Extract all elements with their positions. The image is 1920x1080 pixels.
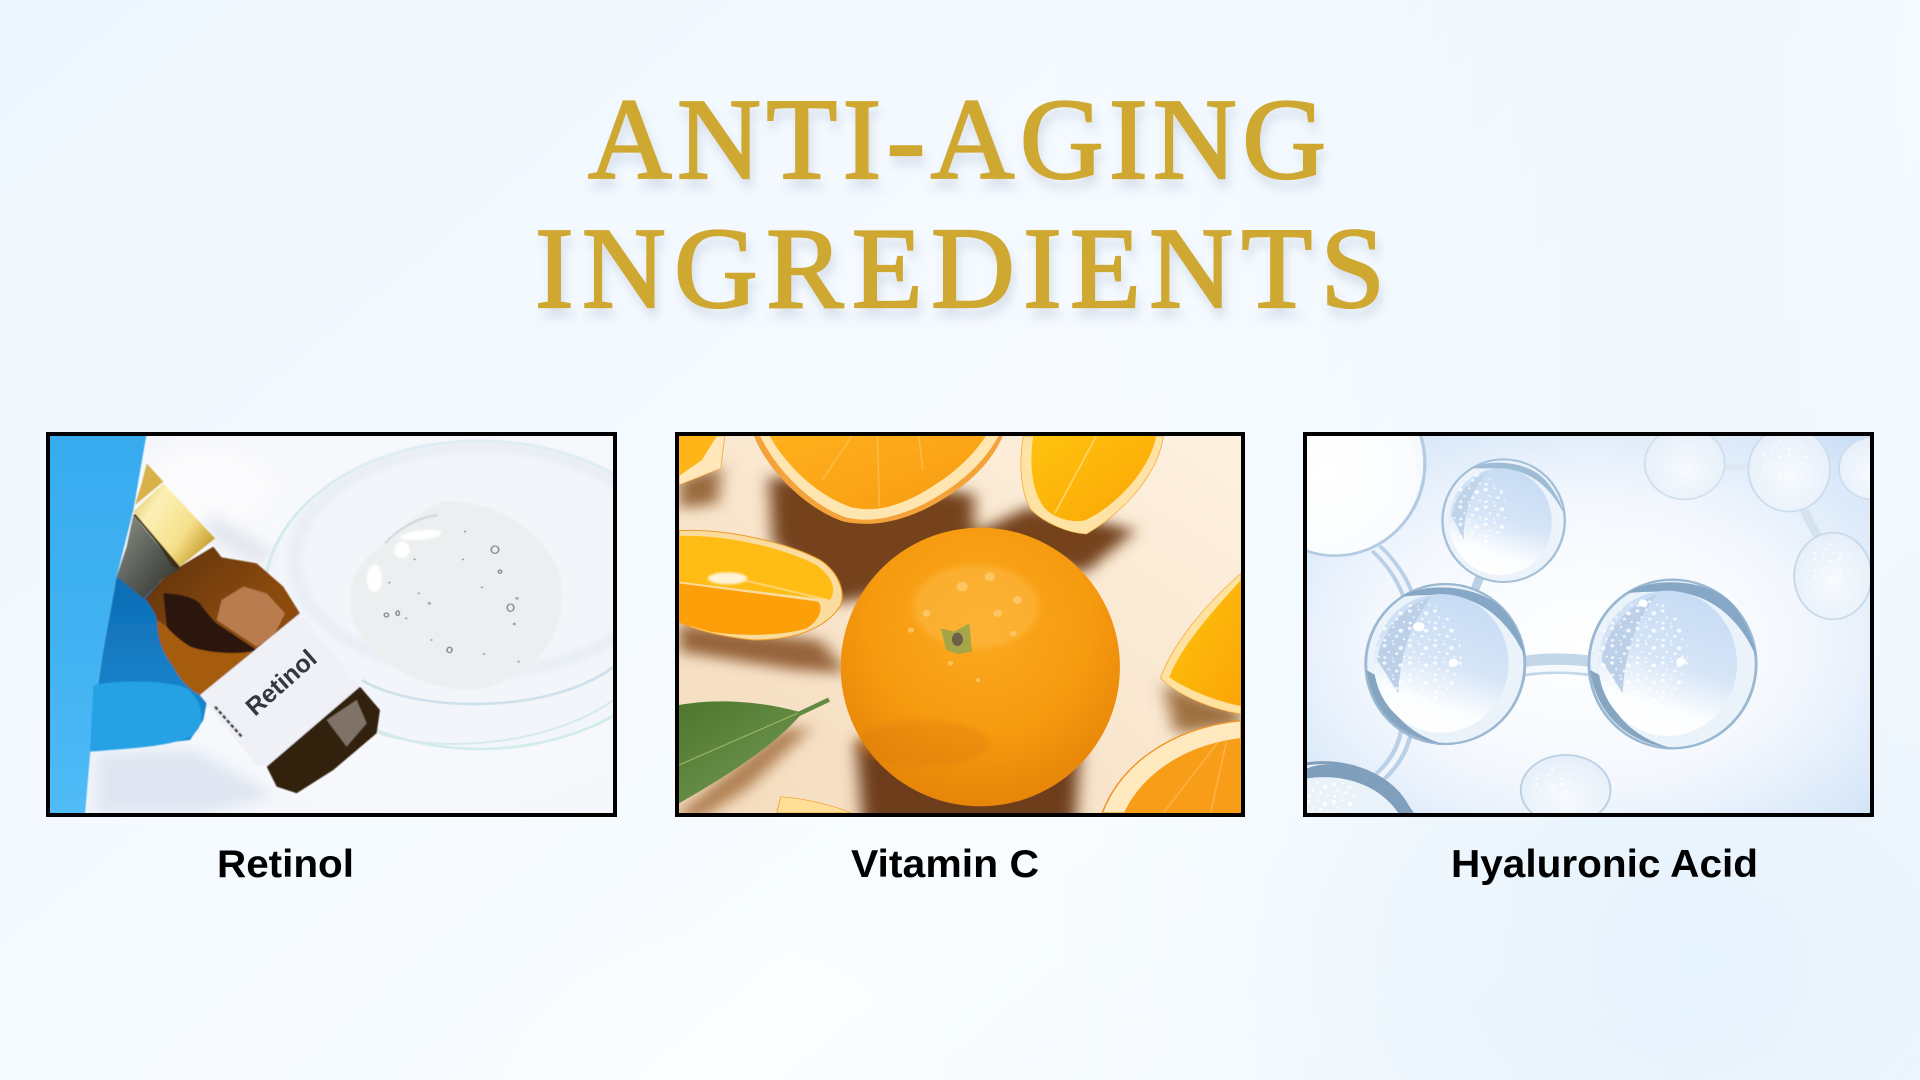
- bubble: center left: [1366, 584, 1525, 744]
- molecule bonds: [1376, 467, 1841, 777]
- label: Vitamin C: Vitamin C: [851, 843, 1039, 886]
- bubble: bottom left: [1232, 763, 1414, 901]
- title: [535, 80, 1385, 330]
- label: Hyaluronic Acid: Hyaluronic Acid: [1451, 843, 1758, 886]
- whole orange: [841, 528, 1120, 806]
- bottle label text: Retinol: [240, 644, 322, 721]
- bubble: center right: [1589, 580, 1756, 748]
- panel: vitamin c photo: [675, 432, 1245, 817]
- shadows: [679, 467, 1241, 833]
- title line 2: INGREDIENTS: [535, 205, 1385, 330]
- orange slices: [679, 436, 1163, 640]
- panel: hyaluronic acid photo: [1303, 432, 1874, 817]
- leaf: [679, 698, 830, 803]
- bottle and glove: [33, 433, 380, 833]
- gel blob: [350, 501, 562, 690]
- petri dish: [264, 441, 695, 749]
- label: Retinol: Retinol: [217, 843, 354, 886]
- bubble: upper: [1442, 459, 1565, 582]
- orange stem: [940, 623, 972, 654]
- right orange slices: [777, 573, 1241, 813]
- panel: retinol photo: [46, 432, 617, 817]
- bubble: top left: [1245, 371, 1425, 556]
- faint bubbles: [1521, 427, 1906, 825]
